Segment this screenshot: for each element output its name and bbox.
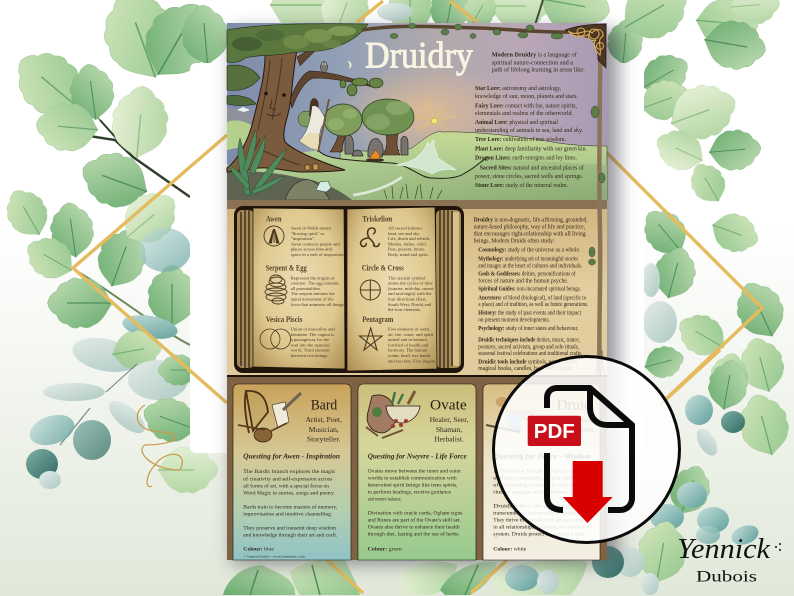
card: Bard: Bards train to become masters of memory, [243,503,338,510]
signature: Yennick Dubois: Yennick [677,534,771,565]
Pentagram entry: air, fire, water, and spirit [388,332,434,338]
great oak trunk with face [227,47,376,172]
card: Ovate: Ovates move between the inner and outer [368,468,461,474]
card: Bard: They preserve and transmit deep wisdom [243,525,337,531]
distant mountain and left hill [227,108,254,122]
Vesica Piscis entry: a passageway for the [291,337,329,342]
card: Druid: Colour: white [493,546,527,552]
panel: right column background [227,209,607,377]
card: Ovate: Healer, Seer, [430,415,469,424]
card: Bard: © Yannick Dubois - www.forestheart.co.uk [243,554,305,559]
card: Ovate: worlds to establish communication with [368,476,457,482]
white path [353,177,402,195]
right border vine with tree trunk [588,34,606,378]
oak tree A [324,104,362,152]
Serpent and Egg entry: creation. The egg contains [291,281,339,286]
list: druid lores: understanding of animals in sea, land and sky. [475,127,583,134]
list: druid lores: elementals and realms of the otherworld. [475,110,573,117]
water dragon [395,140,456,174]
card: Bard: Musician, [309,425,339,434]
Circle and Cross entry: the four elements. [388,307,421,312]
title: Druidry: Druidry [365,36,473,76]
fern plant [229,130,287,196]
Vesica Piscis entry: Vesica Piscis [266,315,303,324]
card: Bard: improvisation and intuitive channelling. [243,511,333,517]
Vesica Piscis entry: Union of masculine and [291,326,335,332]
card: Bard: Questing for Awen - Inspiration [243,451,340,460]
card: Druid: of their community, which includes [493,475,583,482]
left page [253,208,345,369]
list: druid lores: Star Lore: astronomy and astrology, [475,85,561,92]
wood strip [227,200,607,209]
Pentagram entry: united and in balance, [388,337,428,343]
text block: druidry philosophy: nature-based philosophy, way of life and practice, [474,223,586,230]
card: Ovate: and Runes are part of the Ovate's skill set. [368,517,462,524]
Circle and Cross entry: unites the cycles of time [388,281,433,286]
Serpent and Egg entry: Serpent & Egg [266,264,307,273]
Pentagram entry: harmony. The human [388,348,428,353]
Triskelion entry: Life, death and rebirth. [388,236,430,242]
text block: druidry philosophy: Druidic tools include symbols, wands, herbs, [478,359,579,365]
sun with rays [414,101,456,131]
text block: druidry philosophy: Mythology: underlying set of meaningful stories [478,255,579,262]
Serpent and Egg entry [265,264,345,307]
card: Ovate: Herbalist. [434,435,464,444]
card: Druid: Druids follow the priestly path of [493,502,585,509]
Triskelion entry: Body, mind and spirit. [388,252,429,258]
right page [347,207,437,371]
signature: Yennick Dubois [677,534,781,586]
text block: druidry philosophy: seasonal festival celebrations and traditional crafts. [478,350,583,357]
watercolour foliage: right side [592,0,794,595]
Awen entry [264,215,345,257]
campfire [366,149,384,162]
icon: vesica piscis [260,329,291,349]
card: Druid: in all relationships, including the whole eco [493,525,589,531]
list: druid lores: Fairy Lore: contact with fae, nature spirits, [475,102,577,109]
card: Bard [233,384,351,560]
list: druid lores: Sacred Sites: natural and ancestral places of [480,165,585,172]
top vine [362,24,572,39]
icon: triskelion [361,228,379,246]
icon: document outline [547,388,632,510]
Serpent and Egg entry: force that animates all things. [291,302,345,307]
card: Ovate: Shaman, [436,425,462,434]
card: Ovate: benevolent spirit beings like trees spirits, [368,483,458,489]
card: Druid: rites of passage and initiations. [493,489,569,496]
card: Bard: Artist, Poet, [305,415,342,424]
druid figure with staff [299,98,329,152]
card: Bard: The Bardic branch explores the magic [243,469,336,475]
crescent moon [348,61,351,68]
book cover [234,206,464,373]
card: Ovate [358,384,476,560]
card: Ovate: to perform healings, receive guidance [368,489,452,496]
card: Bard: Colour: blue [243,546,275,552]
Pentagram entry: Five elements of earth, [388,326,430,332]
text block: druidry philosophy: forces of nature and the human psyche. [478,277,569,284]
owl on branch [320,62,328,72]
meadow grass [384,184,442,199]
oak canopy [227,24,383,106]
card: Druid: system. Druids protect the natural world. [493,532,586,538]
list: druid lores: Animal Lore: physical and spiritual [475,119,558,126]
icon: circle and cross [360,280,380,300]
card: Bard: and knowledge through their art and craft. [243,532,338,539]
Circle and Cross entry: four directions (East, [388,296,427,302]
Serpent and Egg entry: spiral movement of life [291,296,334,302]
icon: harp, scroll and lute [238,391,301,442]
card: Ovate: Questing for Nwyvre - Life Force [368,451,467,460]
Vesica Piscis entry [260,315,335,358]
crystals [316,181,331,192]
card: Druid: Druid [557,397,592,413]
small tree behind druid [298,111,314,127]
card: Ovate: and restore balance. [368,496,402,502]
card: Bard: Word Magic in stories, songs and poetry. [243,490,336,496]
list: druid lores: knowledge of sun, moon, planets and stars. [475,93,578,100]
card: Druid: Philosopher. [558,425,596,434]
list: druid lores: power, stone circles, sacred wells and springs. [475,173,583,180]
Triskelion entry: Past, present, future. [388,247,426,253]
Pentagram entry: Pentagram [362,315,393,324]
page edges right [436,209,461,369]
card: Ovate: Colour: green [368,546,402,552]
card: Druid: A Druid is a Nature Mystic in service [493,468,589,474]
Circle and Cross entry: This ancient symbol [388,275,426,280]
text block: druidry philosophy: Druidic techniques include deities, music, trance, [478,338,580,344]
card: Ovate: Divination with oracle cards, Ogham signs [368,511,462,517]
celtic knot corner [565,24,606,68]
signature: Yennick Dubois: Dubois [696,569,757,586]
Awen entry: space in a web of inspiration. [291,252,345,257]
page edges left [237,209,254,369]
Awen entry: Awen in Welsh means [291,226,331,230]
Awen entry: Awen [266,215,282,224]
Serpent and Egg entry: Represent the origins of [291,275,335,280]
Triskelion entry [361,214,430,258]
card: Ovate: Ovate [430,397,467,413]
card: Bard: of creativity and self-expression across [243,475,332,482]
Triskelion entry: Triskelion [362,214,393,223]
text block: druidry philosophy: Druidry is non-dogmatic, life-affirming, grounded, [474,216,588,223]
Awen entry: "flowing spirit" or [291,231,325,236]
standing stones [345,135,408,157]
Vesica Piscis entry: feminine. The vagina is [291,332,334,337]
watercolour foliage: top strip [179,0,614,67]
Awen entry: Awen connects people and [291,241,340,246]
panel: landscape scene [227,23,607,200]
icon: pentagram [360,328,382,350]
Serpent and Egg entry: all potentialities. [291,286,321,291]
watercolour foliage: bottom strip [223,558,587,595]
text block: druidry philosophy: a place) and of tradition, as well as future generations. [478,301,589,308]
white inner frame [190,63,644,453]
text block: druidry philosophy: postures, sacred activism, group and solo rituals, [478,345,579,351]
Vesica Piscis entry: world. Third element [291,348,330,353]
text block: druidry philosophy: on present moment developments. [478,317,550,323]
card: Bard: Storyteller. [307,435,341,444]
card: Druid: transcendence and worldly responsibility. [493,510,589,516]
intro text: modern druidry: is a language of [536,52,578,58]
Awen entry: places across time and [291,247,333,252]
text block: druidry philosophy [474,216,589,372]
list: druid lores [475,85,587,189]
rolling hill [340,132,607,200]
list: druid lores: Tree Lore: cultivation of tree wisdom. [475,136,566,143]
card: Bard: all forms of art, with a special focus on [243,482,329,489]
text block: druidry philosophy: Ancestors: of blood (biological), of land (specific to [478,294,586,301]
text block: druidry philosophy: Spiritual Guides: non-incarnated spiritual beings. [478,287,581,293]
intro text: modern druidry: Modern Druidry [492,52,537,58]
Triskelion entry: All sacred trinities: [388,226,423,230]
icon: herb sack and mortar [366,391,420,438]
intro text: modern druidry: path of lifelong learning in areas like: [492,67,585,74]
list: druid lores: Plant Lore: deep familiarity with our green kin. [475,145,587,152]
wood section behind cards [227,375,607,560]
text block: druidry philosophy: Cosmology: study of the universe as a whole. [478,247,581,254]
card: Druid: Priest, Teacher, [554,415,600,424]
text block: druidry philosophy: beings. Modern Druids often study: [474,237,555,244]
Circle and Cross entry: (sunrise, mid-day, sunset [388,286,434,292]
PDF label: PDF [534,420,575,443]
Vesica Piscis entry: soul into the material [291,342,330,347]
Circle and Cross entry: South West, North) and [388,302,432,308]
Pentagram entry: and two feet. Five fingers. [388,358,436,363]
Circle and Cross entry [360,264,434,312]
Triskelion entry: Mother, father, child. [388,241,427,247]
list: druid lores: Stone Lore: study of the mineral realm. [475,182,568,189]
Vesica Piscis entry: between two beings. [291,353,328,358]
card: Druid [483,384,600,560]
Pentagram entry: realm: head, two hands [388,353,431,359]
Awen entry: "inspiration". [291,236,315,241]
card: Druid: Questing for Peace - Wisdom [493,451,591,460]
card: Ovate: Ovates also thrive to enhance their health [368,525,460,531]
foreground rocks [227,171,352,200]
Pentagram entry: fortified of health and [388,342,429,347]
card: Bard: Bard [311,397,338,413]
text block: druidry philosophy: and images at the heart of cultures and individuals. [478,262,583,269]
Serpent and Egg entry: The serpent imitates the [291,291,335,296]
oak tree B [362,99,414,155]
PDF label [528,416,581,446]
card: Druid: of performing ceremonies and rituals, [493,482,586,489]
icon: druid tools [486,397,538,432]
icon: awen [264,226,284,246]
list: druid lores: Dragon Lines: earth energies and ley lines. [475,154,577,161]
intro text: modern druidry: spiritual nature-connection and a [492,59,573,66]
open book [234,206,464,373]
text block: druidry philosophy: that encourages right-relationship with all living [474,231,586,237]
Circle and Cross entry: and mid-night) with the [388,291,432,296]
watercolour foliage: left side [0,0,225,493]
icon: serpent and egg [265,275,287,304]
Triskelion entry: land, sea and sky. [388,231,420,237]
Circle and Cross entry: Circle & Cross [362,264,404,273]
foreground meadow [227,150,607,200]
text block: druidry philosophy: Gods & Goddesses: deities, personifications of [478,270,576,277]
card: Druid: They thrive to increase their positive impact [493,518,590,524]
PDF download badge [494,356,680,542]
lens circle [494,356,680,542]
text block: druidry philosophy: Psychology: study of inner states and behaviour. [478,325,579,332]
text block: druidry philosophy: magical books, candles, bags and crystals. [478,366,575,372]
Pentagram entry [360,315,436,363]
card: Ovate: through diet, fasting and the use of herbs. [368,531,460,538]
poster [227,23,607,560]
poster shadow [232,30,618,564]
text block: druidry philosophy: History: the study of past events and their impact [478,309,581,316]
icon: download arrow [563,461,613,523]
